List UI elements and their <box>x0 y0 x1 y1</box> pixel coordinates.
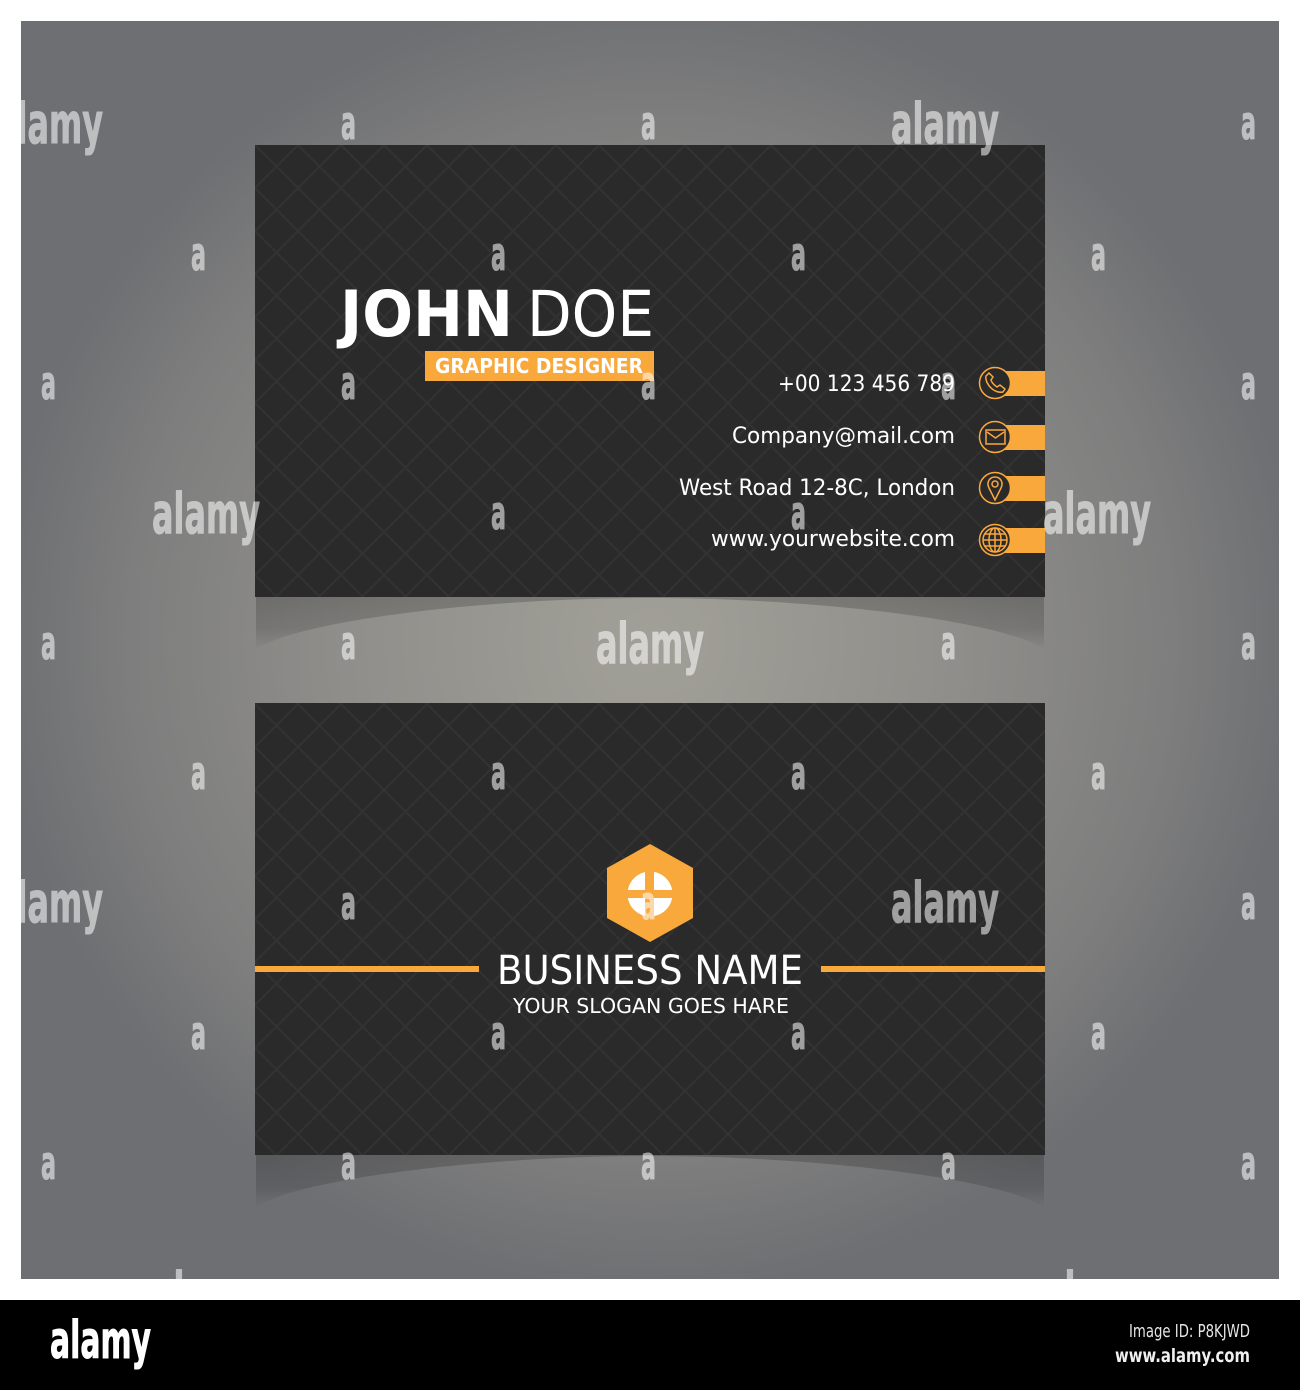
shadow: front card <box>256 597 1044 650</box>
watermarks: a <box>191 746 206 800</box>
watermarks: a <box>41 1136 56 1190</box>
icon: phone <box>980 368 1010 398</box>
watermarks: a <box>341 96 356 150</box>
footer bar <box>0 1300 1300 1390</box>
watermarks: alamy <box>1043 1261 1151 1326</box>
contact text: West Road 12-8C, London <box>679 475 955 501</box>
contact text: www.yourwebsite.com <box>711 526 955 552</box>
watermarks: a <box>491 227 506 281</box>
watermarks: a <box>791 227 806 281</box>
watermarks: a <box>641 356 656 410</box>
watermarks: a <box>191 227 206 281</box>
watermarks: alamy <box>891 871 999 936</box>
watermarks: a <box>491 1006 506 1060</box>
watermarks: a <box>641 1136 656 1190</box>
watermarks: a <box>791 486 806 540</box>
watermarks: a <box>941 356 956 410</box>
name: John Doe: DOE <box>527 278 654 351</box>
contact text <box>679 371 955 552</box>
watermarks: a <box>641 876 656 930</box>
footer logo: alamy <box>50 1311 151 1371</box>
business card mockup infographic: a <box>1241 876 1256 930</box>
business card mockup infographic: a <box>1241 96 1256 150</box>
divider lines <box>255 966 1045 972</box>
watermarks: a <box>1091 1006 1106 1060</box>
icon: mail <box>980 422 1010 452</box>
watermarks: alamy <box>891 92 999 157</box>
white margin below panel <box>0 1279 1300 1300</box>
watermarks: a <box>491 746 506 800</box>
watermarks: alamy <box>152 1261 260 1326</box>
watermarks: a <box>491 486 506 540</box>
watermarks: a <box>941 616 956 670</box>
icon: globe <box>980 524 1010 556</box>
watermarks: a <box>191 1006 206 1060</box>
watermarks: alamy <box>596 612 704 677</box>
watermarks: alamy <box>0 871 103 936</box>
watermarks: alamy <box>152 482 260 547</box>
watermarks: a <box>1091 746 1106 800</box>
watermarks: a <box>941 1136 956 1190</box>
watermarks: alamy <box>1043 482 1151 547</box>
watermarks: a <box>341 876 356 930</box>
watermarks: a <box>341 1136 356 1190</box>
image id: Image ID: P8KJWD <box>1129 1321 1250 1342</box>
panel: front card <box>255 145 1045 597</box>
contact accent bars <box>1000 371 1045 553</box>
panel: back card <box>255 703 1045 1155</box>
watermarks: a <box>641 96 656 150</box>
logo: hexagon <box>607 844 693 942</box>
watermarks: a <box>41 616 56 670</box>
contact text: Company@mail.com <box>732 423 955 449</box>
watermarks: a <box>791 1006 806 1060</box>
contact text: +00 123 456 789 <box>778 371 955 397</box>
name: John Doe: JOHN <box>336 278 513 351</box>
shadow: back card <box>256 1155 1044 1208</box>
watermarks: a <box>41 356 56 410</box>
slogan: YOUR SLOGAN GOES HARE <box>512 994 789 1018</box>
watermarks: a <box>341 616 356 670</box>
business name: BUSINESS NAME <box>497 948 803 994</box>
business card mockup infographic: a <box>1241 356 1256 410</box>
job title badge: GRAPHIC DESIGNER <box>435 354 643 378</box>
watermarks: alamy <box>0 92 103 157</box>
name: John Doe <box>336 278 654 351</box>
website: www.alamy.com <box>1115 1345 1250 1367</box>
icon: location pin <box>980 472 1010 504</box>
watermarks: a <box>1091 227 1106 281</box>
watermarks: a <box>341 356 356 410</box>
business card mockup infographic: a <box>1241 1136 1256 1190</box>
watermarks: a <box>791 746 806 800</box>
business card mockup infographic: a <box>1241 616 1256 670</box>
